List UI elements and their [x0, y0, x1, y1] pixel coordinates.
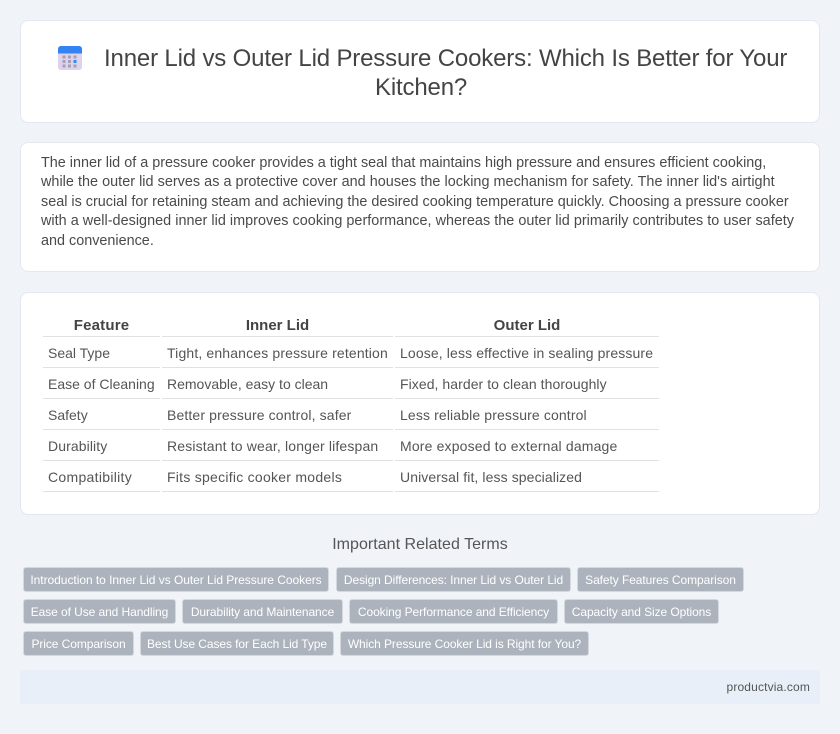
intro text: while the outer lid serves as a protective cover and houses the locking mechanism for safety. The inner lid's airtight	[41, 174, 775, 190]
tag	[340, 631, 589, 656]
tag	[564, 599, 719, 624]
cell: More exposed to external damage	[400, 438, 617, 454]
row: Seal Type: Seal Type	[48, 345, 110, 361]
heading: related terms: Important Related Terms	[332, 536, 508, 553]
cell: Fixed, harder to clean thoroughly	[400, 376, 607, 392]
tag: Introduction to Inner Lid vs Outer Lid Pressure Cookers	[30, 573, 322, 587]
intro text	[41, 155, 794, 249]
tag: Best Use Cases for Each Lid Type	[147, 637, 327, 651]
tag	[23, 631, 134, 656]
cell: Tight, enhances pressure retention	[167, 345, 388, 361]
intro text: and convenience.	[41, 233, 154, 249]
cell: Less reliable pressure control	[400, 407, 587, 423]
tag	[23, 567, 329, 592]
footer bar	[20, 670, 820, 704]
tag	[140, 631, 334, 656]
cell: Loose, less effective in sealing pressure	[400, 345, 653, 361]
comparison table	[43, 317, 659, 492]
panel: intro text card	[20, 142, 820, 272]
tag: Which Pressure Cooker Lid is Right for You?	[348, 637, 581, 651]
footer source: productvia.com	[727, 680, 810, 694]
title	[104, 45, 787, 101]
tag: Safety Features Comparison	[585, 573, 736, 587]
intro text: with a well-designed inner lid improves cooking performance, whereas the outer lid primarily contributes to user safety	[41, 213, 794, 229]
cell: Resistant to wear, longer lifespan	[167, 438, 378, 454]
related terms tags	[23, 567, 744, 656]
tag	[182, 599, 343, 624]
intro text: The inner lid of a pressure cooker provides a tight seal that maintains high pressure and ensures efficient cooking,	[41, 155, 766, 171]
header: Outer Lid: Outer Lid	[494, 317, 560, 334]
cell: Fits specific cooker models	[167, 469, 342, 485]
tag: Durability and Maintenance	[191, 605, 334, 619]
row: Compatibility: Compatibility	[48, 469, 132, 485]
tag	[23, 599, 176, 624]
icon: calendar	[58, 46, 82, 70]
tag: Design Differences: Inner Lid vs Outer Lid	[344, 573, 563, 587]
row: Durability: Durability	[48, 438, 107, 454]
row: Ease of Cleaning: Ease of Cleaning	[48, 376, 155, 392]
panel: title card	[20, 20, 820, 123]
cell: Removable, easy to clean	[167, 376, 328, 392]
title: Inner Lid vs Outer Lid Pressure Cookers: Which Is Better for Your	[104, 45, 787, 72]
header: Feature: Feature	[74, 317, 129, 334]
row: Safety: Safety	[48, 407, 88, 423]
tag: Capacity and Size Options	[572, 605, 711, 619]
header: Inner Lid: Inner Lid	[246, 317, 309, 334]
tag	[577, 567, 744, 592]
cell: Universal fit, less specialized	[400, 469, 582, 485]
tag	[336, 567, 571, 592]
tag: Cooking Performance and Efficiency	[358, 605, 549, 619]
panel: comparison table card	[20, 292, 820, 515]
intro text: seal is crucial for retaining steam and achieving the desired cooking temperature quickly. Choosing a pressure cooker	[41, 194, 789, 210]
tag: Ease of Use and Handling	[31, 605, 168, 619]
tag	[349, 599, 558, 624]
tag: Price Comparison	[31, 637, 126, 651]
title: Kitchen?	[375, 74, 467, 101]
cell: Better pressure control, safer	[167, 407, 351, 423]
